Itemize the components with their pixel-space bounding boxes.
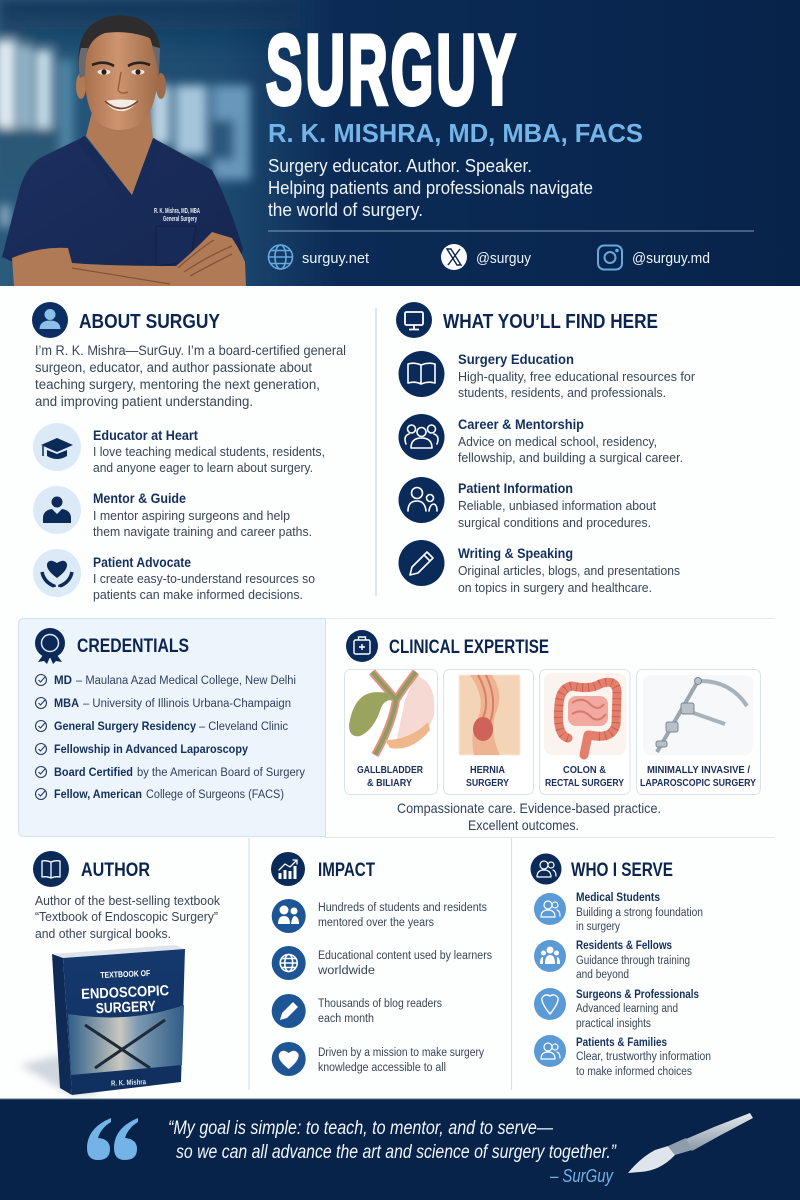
card: hernia: SURGERY [466,777,509,789]
item: mission [272,1042,484,1076]
item: blog readers: Thousands of blog readers [318,998,442,1010]
about text: and improving patient understanding. [35,394,253,409]
subtitle: credentials: R. K. MISHRA, MD, MBA, FACS [268,118,643,148]
item: mission: Driven by a mission to make surgery [318,1047,484,1059]
author text: and other surgical books. [35,926,171,941]
item: surgery education: Surgery Education [458,352,574,367]
card: gallbladder [344,670,438,794]
heading: author: AUTHOR [81,859,150,881]
item: patient advocate: Patient Advocate [93,555,191,570]
item: mentor and guide: Mentor & Guide [93,491,186,506]
book cover: R. K. Mishra [111,1077,147,1088]
icon: award rosette [35,628,65,664]
about text: teaching surgery, mentoring the next generation, [35,377,320,392]
icon: monitor [396,302,432,338]
title: SURGUY [266,14,519,125]
item: mentor and guide: them navigate training and career paths. [93,524,312,539]
icon: X [441,244,467,270]
item: blog readers: each month [318,1013,374,1025]
credentials list: – Cleveland Clinic [199,721,288,733]
item: writing and speaking: on topics in surgery and healthcare. [458,580,652,595]
author text: Author of the best-selling textbook [35,893,220,908]
credentials list [36,674,305,801]
card: colon [540,670,630,794]
portrait of R. K. Mishra [2,15,246,286]
heading: impact: IMPACT [318,859,375,881]
caption: Compassionate care. Evidence-based practice. [397,800,661,816]
item: mentor and guide: I mentor aspiring surgeons and help [93,508,290,523]
item: surgery education: students, residents, and professionals. [458,385,666,400]
tagline: Helping patients and professionals navigate [268,178,593,198]
item: residents and fellows: and beyond [576,969,629,981]
label: MINIMALLY INVASIVE / [647,764,750,776]
item: medical students: Building a strong foundation [576,907,703,919]
torso in scrubs [2,136,243,286]
credentials list: Board Certified [54,767,133,779]
icon: scalpel [628,1113,753,1173]
quote attribution: – SurGuy [549,1166,614,1186]
quote text: “My goal is simple: to teach, to mentor, and to serve— [168,1118,554,1139]
credentials list: by the American Board of Surgery [137,767,305,779]
item: surgeons and professionals [534,988,699,1030]
website: surguy.net [302,250,370,267]
item: worldwide: Educational content used by learners [318,950,492,962]
heading: credentials: CREDENTIALS [77,636,189,657]
panel: clinical expertise [344,630,760,833]
credentials list: MBA [54,698,79,710]
book cover: TEXTBOOK OF [100,968,150,980]
item: patients and families: to make informed choices [576,1066,692,1078]
about text: surgeon, educator, and author passionate about [35,360,312,375]
hair [78,15,160,78]
author text [35,893,220,941]
item: educator at heart [33,423,325,475]
Instagram handle: @surguy.md [632,250,710,267]
social links [268,244,710,270]
pocket [156,226,196,266]
item: surgery education: High-quality, free educational resources for [458,369,696,384]
icon: people [530,854,562,884]
icon: growth chart [271,852,305,886]
quote banner [0,1099,800,1200]
panel: impact [271,852,492,1076]
author text: “Textbook of Endoscopic Surgery” [35,909,218,924]
item: writing and speaking [398,540,680,595]
item: writing and speaking: Original articles, blogs, and presentations [458,563,680,578]
icon: person [32,302,68,338]
item: patient information [398,477,656,530]
item: students mentored [272,899,487,933]
item: career and mentorship: Career & Mentorship [458,417,584,432]
icon: quotation marks [87,1118,138,1160]
credentials list: College of Surgeons (FACS) [146,789,284,801]
eyes and brows [92,63,150,66]
tagline: Surgery educator. Author. Speaker. [268,156,532,176]
credentials list: – Maulana Azad Medical College, New Delhi [76,675,296,687]
heading: clinical expertise: CLINICAL EXPERTISE [389,637,549,658]
caption: Excellent outcomes. [468,817,579,833]
item: patient advocate: patients can make informed decisions. [93,587,303,602]
item: patient information: surgical conditions and procedures. [458,515,651,530]
face [84,28,159,130]
item: patients and families: Clear, trustworthy information [576,1051,711,1063]
panel: author [20,851,220,1095]
tagline [268,156,593,220]
item: mentor and guide [33,486,312,539]
item: surgeons and professionals: practical insights [576,1018,651,1030]
credentials list: Fellowship in Advanced Laparoscopy [54,744,249,756]
name embroidery: R. K. Mishra, MD, MBA [154,208,200,215]
item: career and mentorship [398,414,683,465]
item: mission: knowledge accessible to all [318,1062,446,1074]
caption [397,800,661,833]
item: worldwide: worldwide [317,965,375,977]
label: GALLBLADDER [357,764,423,776]
heading: who i serve: WHO I SERVE [571,859,673,881]
credentials list: – University of Illinois Urbana-Champaign [83,698,291,710]
item: students mentored: Hundreds of students and residents [318,902,487,914]
item: patient information: Patient Information [458,481,573,496]
card: hernia [444,670,534,794]
label: HERNIA [470,764,505,776]
tagline: the world of surgery. [268,200,423,220]
item: educator at heart: and anyone eager to learn about surgery. [93,460,313,475]
panel: who i serve [530,854,711,1078]
icon: open book [33,851,69,887]
item: educator at heart: I love teaching medical students, residents, [93,444,325,459]
X handle: @surguy [476,250,531,267]
panel: credentials [18,618,326,836]
item: patients and families: Patients & Families [576,1037,667,1049]
item: career and mentorship: fellowship, and building a surgical career. [458,450,683,465]
crossed arms [12,232,246,286]
nose [118,72,128,93]
portrait of R. K. Mishra: General Surgery [163,216,197,223]
smile [105,100,138,111]
item: patients and families [534,1035,711,1078]
item: medical students: in surgery [576,921,620,933]
header banner [0,0,800,286]
item: career and mentorship: Advice on medical school, residency, [458,434,657,449]
blurred hospital windows background [0,0,300,227]
quote banner: so we can all advance the art and science of surgery together.” [176,1142,617,1163]
item: patient advocate [33,549,315,602]
credentials list: Fellow, American [54,789,142,801]
item: surgeons and professionals: Advanced learning and [576,1003,678,1015]
item: residents and fellows: Residents & Fellows [576,940,672,952]
credentials list: MD [54,675,72,687]
item: educator at heart: Educator at Heart [93,428,198,443]
label: COLON & [563,764,606,776]
item: patient advocate: I create easy-to-understand resources so [93,571,315,586]
item: medical students [534,892,703,933]
item: residents and fellows: Guidance through training [576,955,690,967]
icon: Instagram [598,246,622,270]
icon: medical kit [346,630,378,662]
card: laparoscopic: LAPAROSCOPIC SURGERY [640,777,756,789]
item: residents and fellows [534,940,690,981]
heading: about: ABOUT SURGUY [79,311,221,333]
item: patient information: Reliable, unbiased information about [458,498,656,513]
credentials list: General Surgery Residency [54,721,197,733]
book cover: ENDOSCOPIC [81,983,170,1003]
book cover [20,945,185,1095]
about text [35,343,346,409]
item: writing and speaking: Writing & Speaking [458,546,573,561]
heading: what you'll find here: WHAT YOU’LL FIND HERE [443,311,658,333]
item: surgeons and professionals: Surgeons & Professionals [576,989,699,1001]
item: students mentored: mentored over the years [318,917,434,929]
icon: globe [268,245,292,269]
about text: I’m R. K. Mishra—SurGuy. I’m a board-certified general [35,343,346,358]
card: colon: RECTAL SURGERY [545,777,624,789]
item: medical students: Medical Students [576,892,660,904]
book cover: SURGERY [95,999,156,1017]
panel: about [32,302,346,602]
item: worldwide [272,946,492,980]
item: blog readers [272,994,442,1028]
card: laparoscopic [636,670,760,794]
card: gallbladder: & BILIARY [367,777,412,789]
item: surgery education [398,351,696,400]
panel: what you'll find here [396,302,696,595]
ears [76,73,86,99]
neck [86,112,153,195]
